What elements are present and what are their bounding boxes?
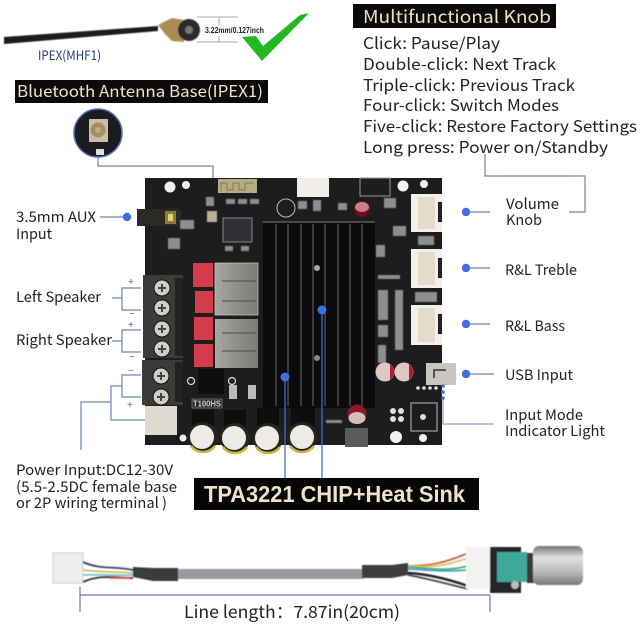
callout: Left Speaker: − bbox=[129, 309, 135, 320]
label: IPEX(MHF1): IPEX(MHF1) bbox=[38, 45, 101, 64]
callout: R&L Bass: R&L Bass bbox=[505, 315, 565, 336]
mounting holes bbox=[164, 180, 428, 443]
USB socket bbox=[426, 363, 456, 385]
wires, left bbox=[83, 562, 133, 582]
small components bbox=[167, 197, 437, 423]
callout: Input Mode Indicator Light: Indicator Light bbox=[505, 420, 606, 441]
power terminal block bbox=[142, 360, 183, 405]
red capacitor, top bbox=[354, 201, 370, 217]
icon: green check mark bbox=[242, 13, 309, 61]
callout: Input Mode Indicator Light bbox=[441, 384, 606, 441]
text block: knob functions: Double-click: Next Track bbox=[363, 51, 556, 75]
callout: Left Speaker: + bbox=[128, 277, 134, 288]
callout: 3.5mm AUX Input: 3.5mm AUX bbox=[16, 206, 97, 227]
callout: Left Speaker: Left Speaker bbox=[16, 286, 101, 307]
two red capacitors bbox=[376, 362, 414, 382]
connector line: antenna base bbox=[98, 157, 213, 197]
callout: Left Speaker bbox=[16, 277, 141, 320]
sleeve, left bbox=[133, 567, 178, 581]
knob cable bbox=[53, 546, 583, 593]
callout: Power Input: or 2P wiring terminal ) bbox=[16, 492, 167, 513]
callout: R&L Treble bbox=[462, 259, 577, 280]
callout: Right Speaker bbox=[16, 320, 141, 363]
grey inductors bbox=[215, 263, 258, 368]
callout: R&L Treble: R&L Treble bbox=[505, 259, 577, 280]
callout: Volume Knob: Volume bbox=[506, 193, 559, 214]
AUX jack bbox=[137, 209, 180, 226]
footprint and pads lower right bbox=[390, 386, 438, 431]
label: line length: Line length：7.87in(20cm) bbox=[184, 598, 400, 623]
knob PCB and housing bbox=[466, 547, 490, 589]
heading: Bluetooth Antenna Base(IPEX1): Bluetooth Antenna Base(IPEX1) bbox=[17, 78, 263, 102]
dimension line bbox=[80, 587, 490, 612]
callout: Input Mode Indicator Light: Input Mode bbox=[505, 404, 583, 425]
callout: Volume Knob: Knob bbox=[506, 209, 542, 230]
connector dimension: 3.22mm/0.127inch: 3.22mm/0.127inch bbox=[205, 26, 264, 35]
text block: knob functions: Click: Pause/Play bbox=[363, 30, 501, 54]
callout: Power Input: (5.5-2.5DC female base bbox=[16, 476, 177, 497]
white connectors, right bbox=[411, 194, 442, 345]
white connector, top bbox=[297, 178, 329, 197]
text block: knob functions: Triple-click: Previous Track bbox=[363, 72, 575, 96]
outlined footprint, top bbox=[360, 178, 390, 196]
metal knob bbox=[533, 546, 583, 585]
callout: USB Input bbox=[462, 364, 574, 385]
callout: USB Input: USB Input bbox=[505, 364, 574, 385]
callout lines: chip and heat sink bbox=[280, 306, 326, 478]
callout: Power Input: Power Input:DC12-30V bbox=[16, 459, 174, 480]
heading: TPA3221 CHIP+Heat Sink: TPA3221 CHIP+Heat Sink bbox=[204, 481, 465, 507]
electrolytic capacitors bbox=[188, 422, 317, 453]
callout: Right Speaker: + bbox=[128, 320, 134, 331]
callout: Power Input: + bbox=[127, 400, 133, 411]
diode and T100HS label bbox=[188, 369, 256, 408]
bottom inductor and capacitor bbox=[345, 404, 368, 447]
sleeve, right bbox=[362, 563, 408, 578]
callout: Volume Knob bbox=[462, 154, 585, 230]
main IC bbox=[223, 218, 252, 242]
callout: Right Speaker: Right Speaker bbox=[16, 329, 112, 350]
callout: 3.5mm AUX Input bbox=[16, 206, 131, 244]
round footprint bbox=[277, 199, 295, 217]
grey cable bbox=[178, 569, 364, 579]
icon: antenna socket close-up bbox=[74, 109, 122, 157]
callout: Right Speaker: − bbox=[129, 352, 135, 363]
callout: Power Input: − bbox=[128, 366, 134, 377]
black capacitor bases bbox=[192, 408, 315, 428]
connector dimension: 3.22mm/0.127inch bbox=[197, 17, 264, 42]
amplifier board bbox=[137, 178, 456, 453]
heat sink bbox=[263, 222, 375, 408]
callout: Power Input bbox=[16, 366, 177, 513]
diode and T100HS label: T100HS bbox=[193, 400, 222, 408]
speaker terminal block bbox=[143, 275, 183, 358]
4-pin plug bbox=[53, 553, 83, 583]
text block: knob functions bbox=[363, 30, 637, 158]
callout: 3.5mm AUX Input: Input bbox=[16, 223, 53, 244]
DC jack bbox=[145, 406, 177, 435]
text block: knob functions: Long press: Power on/Standby bbox=[363, 134, 609, 158]
red film capacitors bbox=[193, 263, 213, 367]
text block: knob functions: Five-click: Restore Factory Settings bbox=[363, 113, 637, 137]
callout: R&L Bass bbox=[462, 315, 565, 336]
heading: Multifunctional Knob: Multifunctional Knob bbox=[363, 4, 551, 29]
bluetooth module antenna bbox=[218, 179, 257, 193]
antenna cable with IPEX connector bbox=[4, 18, 200, 44]
wires, right bbox=[408, 553, 468, 589]
text block: knob functions: Four-click: Switch Modes bbox=[363, 92, 559, 116]
